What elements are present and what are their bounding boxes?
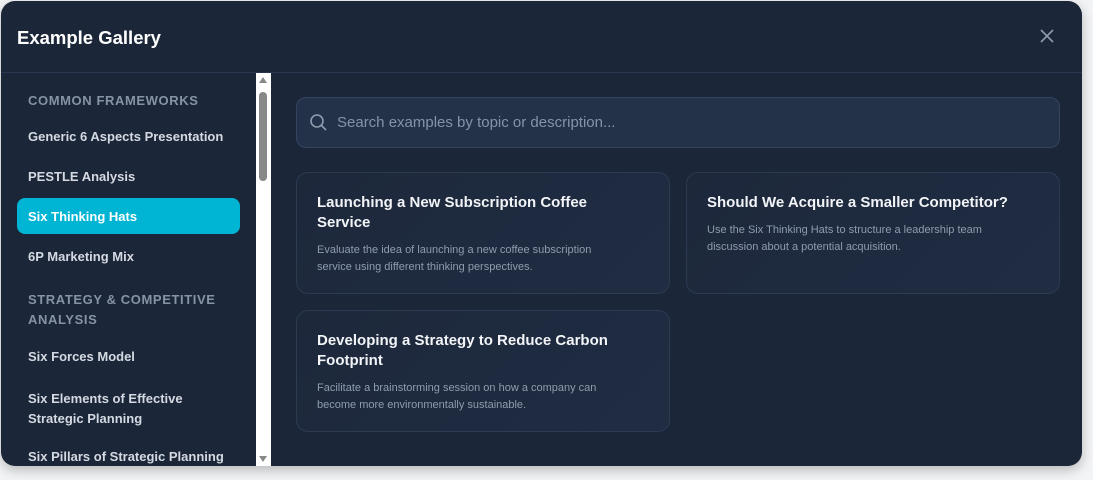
item: 6P Marketing Mix xyxy=(28,249,134,264)
card: acquire: Should We Acquire a Smaller Competitor? xyxy=(707,194,1008,211)
item: PESTLE Analysis xyxy=(28,169,135,184)
card: carbon xyxy=(296,310,670,432)
icon: close xyxy=(1040,30,1054,42)
header title: Example Gallery xyxy=(17,27,161,48)
item: Six Elements of Effective xyxy=(28,391,183,406)
card: acquire xyxy=(686,172,1060,294)
item: Six Pillars of Strategic Planning xyxy=(28,449,224,464)
icon: search xyxy=(310,114,326,130)
section heading: strategy: ANALYSIS xyxy=(28,312,97,327)
search box: Search examples by topic or description... xyxy=(337,114,615,131)
item: Six Forces Model xyxy=(28,349,135,364)
scrollbar xyxy=(256,73,271,466)
card: coffee: Evaluate the idea of launching a new coffee subscription service using different thinking perspectives. xyxy=(317,244,591,273)
search box xyxy=(296,97,1060,148)
card: coffee xyxy=(296,172,670,294)
section heading: strategy xyxy=(28,292,216,327)
card: carbon: Facilitate a brainstorming session on how a company can become more environmentally sustainable. xyxy=(317,382,596,411)
section heading: common frameworks: COMMON FRAMEWORKS xyxy=(28,93,199,108)
card: acquire: Use the Six Thinking Hats to structure a leadership team discussion about a potential acquisition. xyxy=(707,224,982,253)
card: carbon: Developing a Strategy to Reduce Carbon Footprint xyxy=(317,332,608,369)
item: Strategic Planning xyxy=(28,411,142,426)
item: selected: Six Thinking Hats xyxy=(28,209,137,224)
section heading: strategy: STRATEGY & COMPETITIVE xyxy=(28,292,216,307)
item: selected xyxy=(17,198,240,234)
item xyxy=(28,391,183,426)
card: coffee: Launching a New Subscription Coffee Service xyxy=(317,194,587,231)
item: Generic 6 Aspects Presentation xyxy=(28,129,223,144)
sidebar xyxy=(17,93,240,464)
